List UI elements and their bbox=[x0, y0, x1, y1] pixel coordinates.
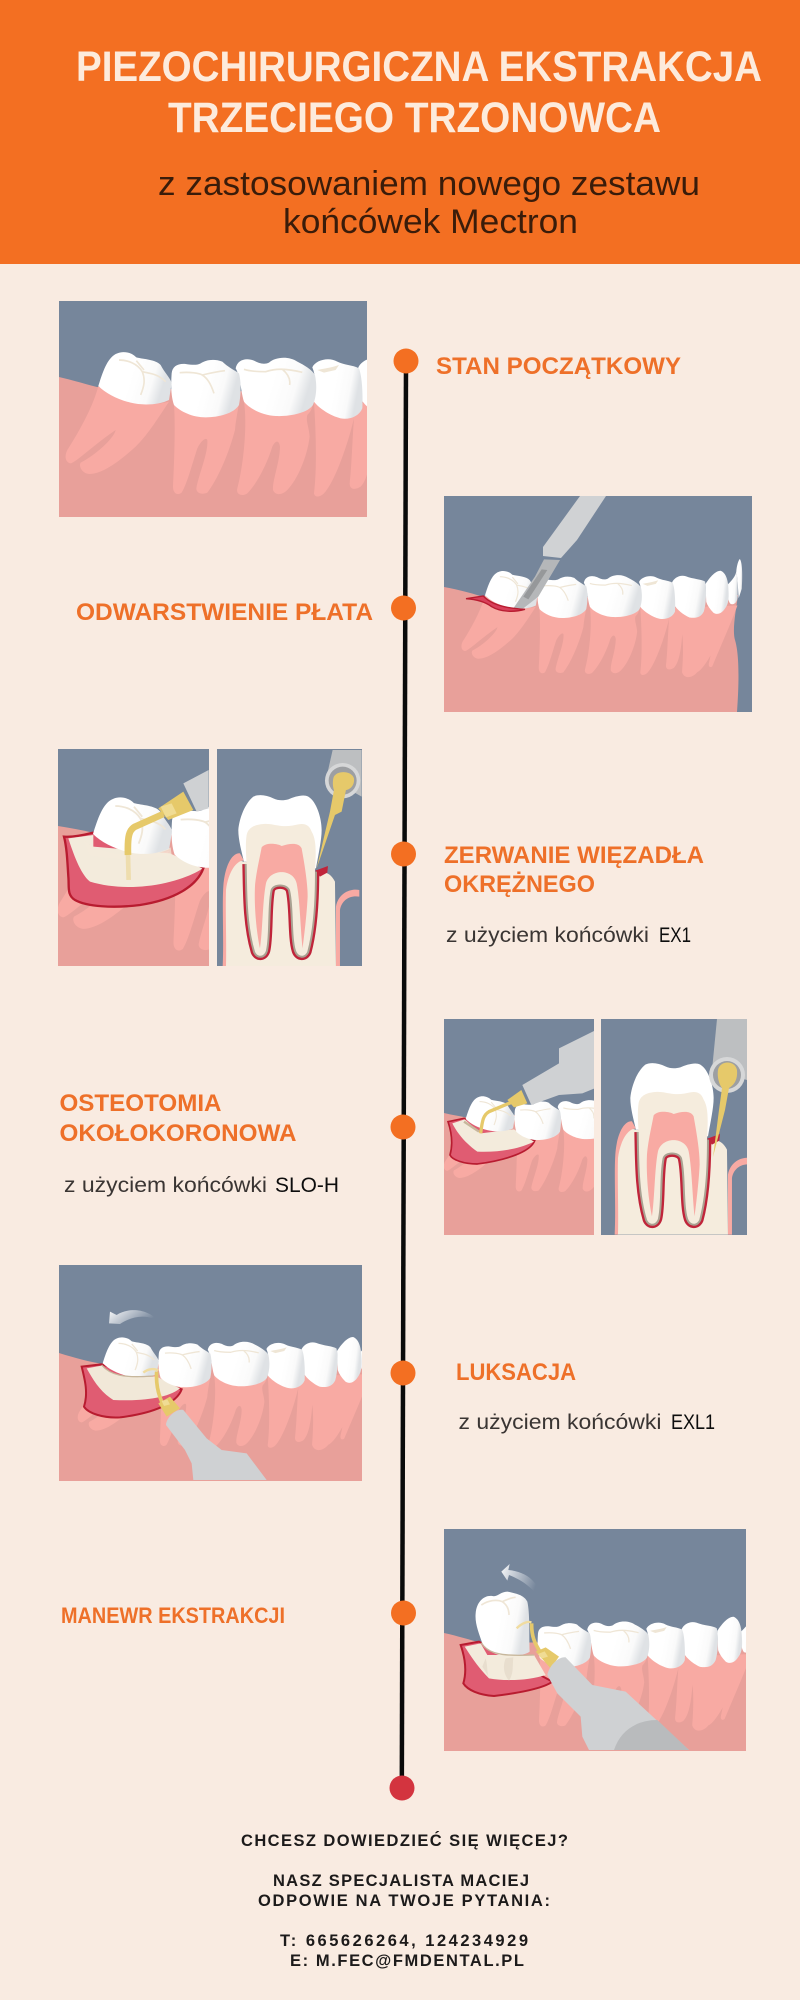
text: tip EX1: z użyciem końcówki bbox=[446, 924, 649, 947]
scalpel bbox=[513, 496, 606, 608]
panel: ligament illustration, molar bbox=[58, 749, 209, 966]
panel: ligament illustration, cross-section bbox=[217, 749, 362, 967]
subtitle: końcówek Mectron bbox=[283, 203, 578, 241]
panel: osteotomy illustration, cross-section bbox=[601, 1019, 751, 1235]
extracted tooth bbox=[476, 1592, 534, 1655]
heading: osteotomia okołokoronowa: OSTEOTOMIA bbox=[60, 1090, 222, 1117]
heading: zerwanie więzadła okrężnego: OKRĘŻNEGO bbox=[444, 871, 595, 898]
instrument tip bbox=[709, 1019, 747, 1157]
text: tip SLO-H: SLO-H bbox=[275, 1174, 339, 1197]
heading: zerwanie więzadła okrężnego bbox=[444, 842, 704, 898]
footer contact text: T: 665626264, 124234929 bbox=[280, 1932, 528, 1950]
arrow bbox=[501, 1564, 534, 1589]
subtitle bbox=[158, 165, 700, 241]
footer contact text: CHCESZ DOWIEDZIEĆ SIĘ WIĘCEJ? bbox=[241, 1831, 568, 1850]
heading: manewr ekstrakcji: MANEWR EKSTRAKCJI bbox=[61, 1603, 285, 1628]
heading: zerwanie więzadła okrężnego: ZERWANIE WIĘZADŁA bbox=[444, 842, 704, 869]
heading: osteotomia okołokoronowa: OKOŁOKORONOWA bbox=[60, 1120, 296, 1147]
timeline bbox=[390, 348, 418, 1800]
instrument bbox=[517, 1622, 689, 1750]
instrument bbox=[464, 1031, 595, 1133]
bone opening bbox=[82, 1364, 182, 1417]
bone opening bbox=[461, 1642, 552, 1696]
instrument tip bbox=[317, 750, 362, 868]
heading: luksacja: LUKSACJA bbox=[456, 1359, 576, 1386]
header band bbox=[0, 0, 800, 264]
footer contact text bbox=[241, 1831, 568, 1970]
ultrasonic instrument bbox=[124, 770, 209, 880]
instrument bbox=[143, 1369, 267, 1480]
bone opening bbox=[448, 1118, 535, 1164]
panel: extraction illustration bbox=[444, 1529, 757, 1751]
heading: odwarstwienie płata: ODWARSTWIENIE PŁATA bbox=[76, 599, 373, 626]
text: tip SLO-H: z użyciem końcówki bbox=[64, 1174, 267, 1197]
footer contact text: ODPOWIE NA TWOJE PYTANIA: bbox=[258, 1892, 550, 1910]
title: TRZECIEGO TRZONOWCA bbox=[168, 94, 661, 142]
arrow bbox=[109, 1310, 152, 1324]
panel: flap elevation illustration bbox=[444, 496, 752, 712]
footer contact text: E: M.FEC@FMDENTAL.PL bbox=[290, 1952, 524, 1970]
text: tip EX1: EX1 bbox=[659, 924, 691, 947]
footer contact text: NASZ SPECJALISTA MACIEJ bbox=[273, 1872, 529, 1890]
heading: stan początkowy: STAN POCZĄTKOWY bbox=[436, 353, 681, 380]
text: tip EXL1: EXL1 bbox=[671, 1411, 715, 1434]
panel: initial state illustration bbox=[59, 301, 367, 517]
heading: osteotomia okołokoronowa bbox=[60, 1090, 296, 1147]
panel: osteotomy illustration, molar bbox=[444, 1019, 594, 1235]
text: tip EXL1: z użyciem końcówki bbox=[458, 1411, 662, 1434]
title bbox=[76, 43, 762, 142]
text: tip SLO-H bbox=[64, 1174, 339, 1197]
subtitle: z zastosowaniem nowego zestawu bbox=[158, 165, 700, 203]
panel: luxation illustration bbox=[59, 1265, 376, 1481]
flap bbox=[466, 596, 525, 611]
